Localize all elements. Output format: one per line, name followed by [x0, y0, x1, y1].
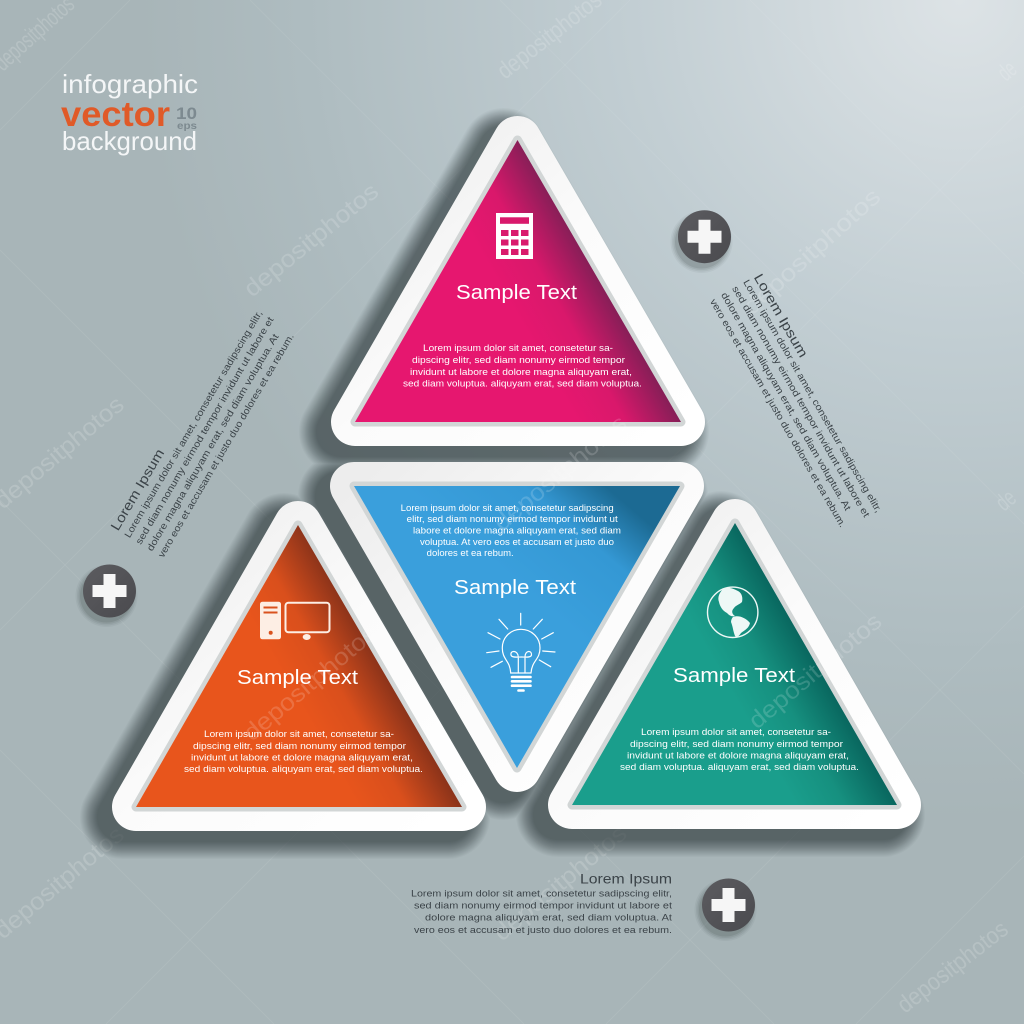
text block: left rotated: Lorem Ipsum [108, 446, 167, 533]
heading: sample text: Sample Text [456, 282, 577, 304]
text block [620, 726, 859, 772]
button: plus left [76, 564, 138, 627]
watermarks: depositphotos [239, 178, 384, 303]
text block: dipscing elitr, sed diam nonumy eirmod tempor [630, 738, 843, 749]
text block: bottom: Lorem ipsum dolor sit amet, consetetur sadipscing elitr, [411, 888, 672, 900]
icon: light bulb [487, 613, 555, 690]
text block: invidunt ut labore et dolore magna aliquyam erat, [627, 750, 849, 760]
text block: left rotated: sed diam nonumy eirmod tempor invidunt ut labore et [134, 315, 277, 547]
text block: right rotated [707, 270, 897, 534]
heading: sample text: Sample Text [454, 577, 576, 599]
text block: sed diam voluptua. aliquyam erat, sed diam voluptua. [184, 763, 423, 774]
watermarks over panels: depositphotos [744, 608, 887, 735]
button: plus bottom [694, 878, 756, 941]
watermarks: depositphotos [738, 183, 886, 320]
panel: blue triangle [354, 486, 680, 768]
watermarks: depositphotos [892, 916, 1013, 1019]
logo: infographic vector background: eps [177, 120, 197, 132]
watermarks over panels [239, 410, 887, 747]
text block: left rotated: dolore magna aliquyam erat, sed diam voluptua. At [145, 332, 282, 553]
button: plus top right [670, 210, 732, 273]
text block: right rotated: Lorem Ipsum [751, 271, 811, 360]
heading: sample text: Sample Text [237, 667, 358, 689]
text block: bottom: dolore magna aliquyam erat, sed diam voluptua. At [425, 912, 672, 924]
text block: dipscing elitr, sed diam nonumy eirmod tempor [193, 740, 406, 751]
text block: bottom [411, 872, 672, 936]
text block: left rotated [108, 299, 299, 560]
text block [401, 502, 621, 558]
text block: Lorem ipsum dolor sit amet, consetetur sadipscing [401, 502, 614, 513]
text block [184, 728, 423, 774]
logo: infographic vector background: 10 [176, 104, 197, 123]
text block: right rotated: dolore magna aliquyam erat, sed diam voluptua. At [718, 291, 853, 513]
text block: left rotated: vero eos et accusam et justo duo dolores et ea rebum. [156, 332, 297, 560]
text block: bottom: Lorem Ipsum [580, 872, 672, 886]
text block: invidunt ut labore et dolore magna aliquyam erat, [410, 366, 632, 377]
text block: right rotated: vero eos et accusam et justo duo dolores et ea rebum. [707, 297, 848, 530]
watermarks over panels: depositphotos [239, 620, 382, 747]
text block: left rotated: Lorem ipsum dolor sit amet, consetetur sadipscing elitr, [123, 309, 265, 540]
watermarks over panels: depositphotos [489, 410, 632, 537]
text block: dipscing elitr, sed diam nonumy eirmod tempor [412, 354, 625, 365]
heading: sample text: Sample Text [673, 665, 795, 687]
text block: sed diam voluptua. aliquyam erat, sed diam voluptua. [620, 761, 859, 772]
text block: voluptua. At vero eos et accusam et justo duo [420, 536, 614, 547]
watermarks: depositphotos [489, 820, 632, 947]
text block [403, 342, 642, 388]
text block: labore et dolore magna aliquyam erat, sed diam [413, 524, 621, 536]
text block: Lorem ipsum dolor sit amet, consetetur sa- [204, 728, 394, 739]
text block: sed diam voluptua. aliquyam erat, sed diam voluptua. [403, 378, 642, 388]
panel: orange triangle [136, 525, 462, 807]
text block: invidunt ut labore et dolore magna aliquyam erat, [191, 752, 413, 762]
panel: magenta triangle [355, 140, 681, 422]
logo: infographic vector background: background [62, 126, 197, 156]
triangle shadows [122, 150, 883, 817]
text block: bottom: sed diam nonumy eirmod tempor invidunt ut labore et [414, 900, 672, 912]
logo: infographic vector background [61, 69, 198, 156]
logo: infographic vector background: infographic [62, 69, 198, 99]
icon: desktop computer [260, 602, 330, 640]
panel: green triangle [572, 523, 897, 805]
icon: calculator [496, 213, 533, 259]
logo: infographic vector background: vector [61, 95, 170, 134]
text block: right rotated: sed diam nonumy eirmod tempor invidunt ut labore et [729, 284, 872, 520]
text block: Lorem ipsum dolor sit amet, consetetur sa- [423, 342, 613, 353]
icon: globe [708, 587, 758, 638]
text block: dolores et ea rebum. [427, 547, 514, 558]
text block: elitr, sed diam nonumy eirmod tempor invidunt ut [407, 513, 618, 524]
text block: bottom: vero eos et accusam et justo duo dolores et ea rebum. [414, 925, 672, 936]
text block: right rotated: Lorem ipsum dolor sit amet, consetetur sadipscing elitr, [740, 278, 883, 515]
text block: Lorem ipsum dolor sit amet, consetetur sa- [641, 726, 831, 737]
